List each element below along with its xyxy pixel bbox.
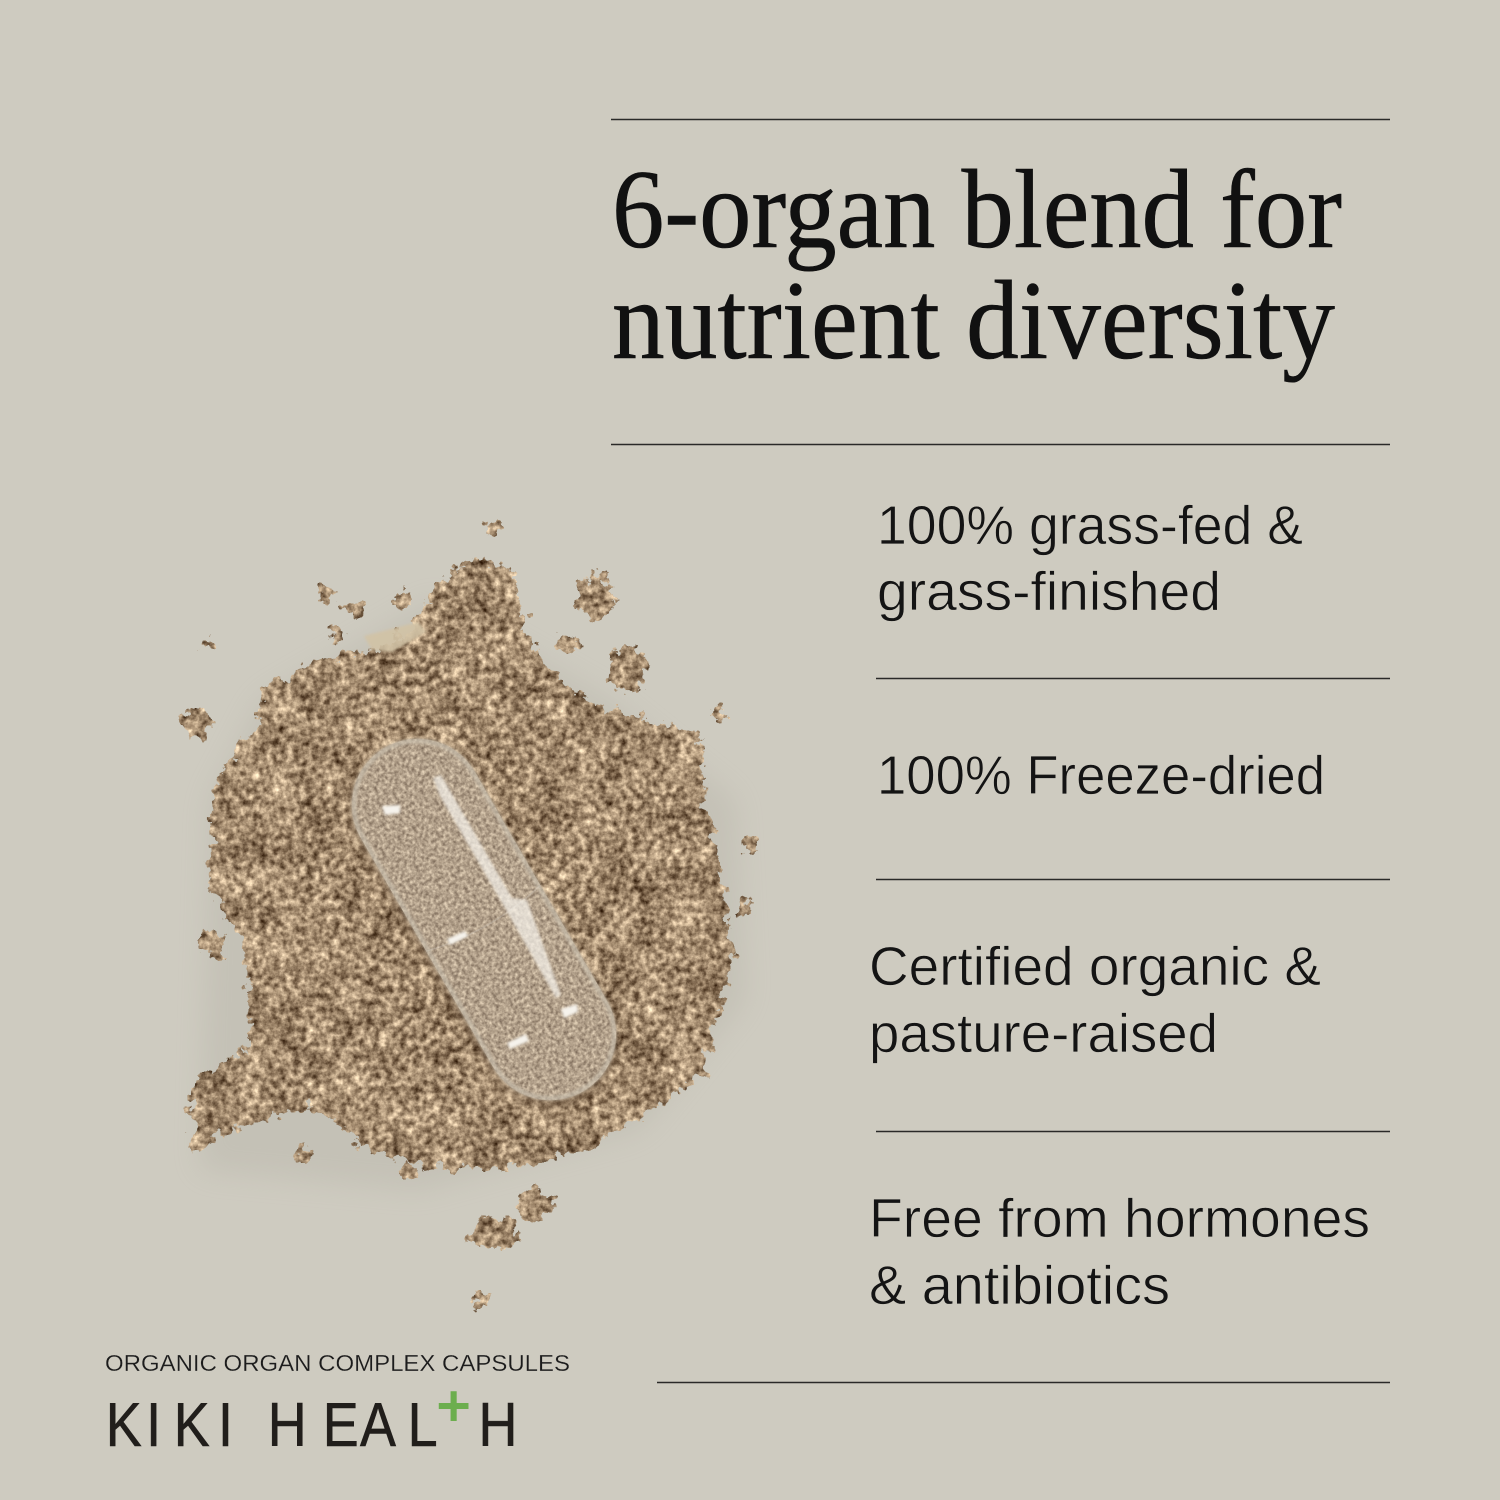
logo: Kiki Health: H [479,1391,517,1460]
feature: free from hormones [869,1187,1370,1316]
pale flake [364,622,426,652]
capsule shadow [324,718,642,1133]
capsule fill [328,715,640,1124]
feature: grass-fed [877,494,1303,622]
feature: organic: pasture-raised [869,1002,1218,1064]
feature: grass-fed: 100% grass-fed & [877,494,1303,556]
logo: Kiki Health: KIKI [106,1391,233,1460]
feature: organic: Certified organic & [869,935,1321,997]
logo: Kiki Health [106,1374,517,1460]
loose crumbs [576,575,614,619]
capsule highlights [382,775,578,1049]
powder pile [184,521,758,1309]
title [612,148,1342,383]
logo plus mark: + [437,1374,470,1438]
capsule rim [330,717,638,1122]
rules: title frame [611,120,1390,444]
title: 6-organ blend for [612,148,1342,272]
product label: ORGANIC ORGAN COMPLEX CAPSULES [105,1350,570,1376]
feature: free from hormones: Free from hormones [869,1187,1370,1249]
capsule seam [426,885,544,958]
feature: free from hormones: & antibiotics [869,1254,1170,1316]
title: nutrient diversity [612,259,1335,383]
feature: grass-fed: grass-finished [877,560,1221,622]
pile shadow [200,600,745,1190]
feature: organic [869,935,1321,1064]
feature: freeze-dried: 100% Freeze-dried [877,744,1325,806]
logo: Kiki Health: HEAL [268,1391,438,1460]
capsule [322,715,644,1133]
feature list [657,494,1390,1382]
powder pile with capsule [184,521,758,1309]
